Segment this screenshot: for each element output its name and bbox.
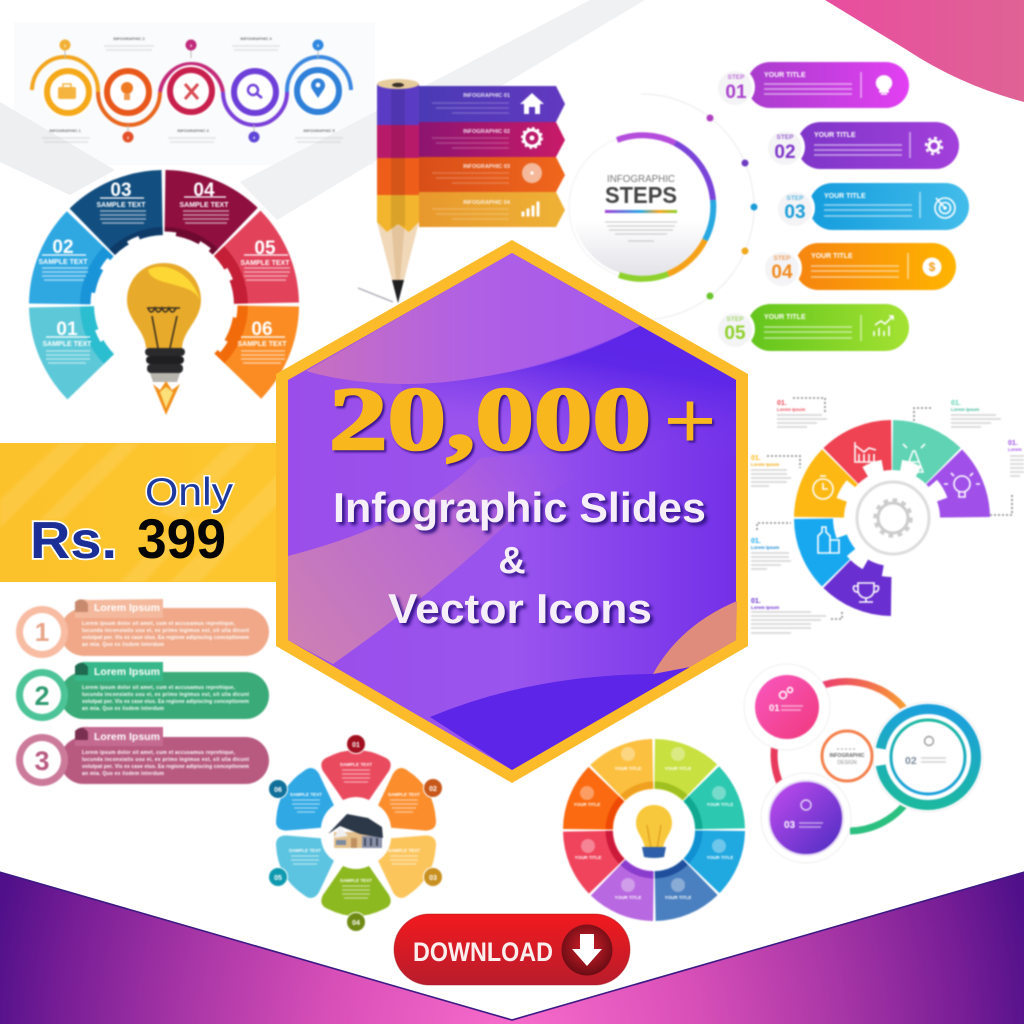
flower number nodes: 02 [429,786,437,793]
circle 2 [872,701,984,813]
circle 2: 02 [905,755,917,767]
fan labels: SAMPLE TEXT [179,202,229,209]
central badge: STEPS [605,182,677,208]
circle 3 [761,773,851,863]
gear fan callouts: 01. [751,538,761,545]
ribbon captions: INFOGRAPHIC 04 [463,200,511,206]
timeline rings [42,65,344,118]
list row 3 [16,727,269,786]
list row 1: Lorem ipsum dolor sit amet, cum et accusamus reprehique, [82,621,236,627]
ribbon captions: INFOGRAPHIC 03 [463,164,510,170]
gear fan callouts: Lorem [1008,447,1022,452]
gear fan callouts: 01. [751,455,761,462]
flower labels: SAMPLE TEXT [388,848,420,853]
step 4: STEP [774,255,791,262]
headline: subtitle: Vector Icons [388,585,652,632]
step 2: YOUR TITLE [814,132,856,139]
gear fan callouts: 01. [951,400,961,407]
gear fan callouts: 01. [1008,440,1018,447]
orbit and dots [641,94,758,320]
timeline wave ribbon [32,57,351,125]
list row 3: Iucunda inconsiatis usu ei, ex primo legimus est, sit ulia dicunt [82,757,249,763]
timeline nodes: 3 [190,43,193,48]
list row 3: an mia. Quo ex iisdem interdum [82,771,165,777]
list row 2 [16,662,269,721]
wheel labels: YOUR TITLE [707,802,733,807]
list row 1 [16,599,269,658]
flower number nodes: 06 [274,787,282,794]
flower number nodes: 05 [274,875,282,882]
connector ring [774,682,907,831]
step 3 [775,183,969,230]
banner: price offer [0,443,282,582]
wheel labels: YOUR TITLE [575,855,601,860]
step 1: STEP [728,74,745,81]
flower labels: SAMPLE TEXT [290,792,322,797]
timeline nodes: 1 [64,43,67,48]
gear fan callouts [751,398,1024,633]
step 5: 05 [724,323,746,344]
list row 1: an mia. Quo ex iisdem interdum [82,642,165,648]
step 5: YOUR TITLE [764,314,806,321]
ribbon captions: INFOGRAPHIC 02 [463,129,510,135]
fan labels: SAMPLE TEXT [38,259,88,266]
step 4: 04 [771,262,793,283]
central badge [569,135,713,279]
panel: three numbered ribbon list [16,599,269,786]
ribbon captions [432,93,511,219]
headline: subtitle [333,484,706,632]
step 4: $ [929,260,936,274]
step 4: YOUR TITLE [811,253,853,260]
gear fan callouts: 01. [751,598,761,605]
step 3: 03 [784,202,806,223]
ribbons [419,86,565,227]
step 4 [762,243,956,290]
list row 2: Lorem ipsum dolor sit amet, cum et accusamus reprehique, [82,685,236,691]
fan labels: SAMPLE TEXT [42,341,92,348]
flower labels: SAMPLE TEXT [340,762,372,767]
flower labels: SAMPLE TEXT [340,878,372,883]
list row 1: 1 [35,617,49,647]
flower number nodes [268,734,442,932]
fan labels: SAMPLE TEXT [96,202,146,209]
flower labels [289,762,420,898]
flower number nodes: 01 [352,742,360,749]
gear centre [839,465,945,571]
fan segments [20,161,308,449]
timeline nodes: 2 [127,135,130,140]
icon: house [323,800,389,866]
step 1 [715,62,909,108]
flower number nodes: 03 [429,875,437,882]
ribbon icons [520,93,544,216]
list row 3: Lorem Ipsum [94,731,160,743]
gear fan callouts: Lorem Ipsum [751,605,779,610]
list row 3: volutpat per. Vis ex case eius. Ea regione adipiscing conceptionem [82,764,250,770]
timeline captions: INFOGRAPHIC 4 [240,36,272,41]
fan labels: 06 [251,319,273,340]
ribbon captions: INFOGRAPHIC 01 [463,93,510,99]
white gear centre [93,234,235,376]
wheel labels: YOUR TITLE [665,766,691,771]
icon: wheel lightbulb [636,805,672,858]
flower petals [267,750,445,916]
gear fan segments [793,419,991,617]
step 1: YOUR TITLE [764,72,806,79]
step 3: YOUR TITLE [824,193,866,200]
wheel segments [561,737,747,923]
timeline captions: INFOGRAPHIC 5 [303,128,335,133]
panel: eight segment bulb wheel [561,737,747,923]
fan labels: 04 [193,180,215,201]
list row 3: 3 [34,746,50,776]
fan labels: SAMPLE TEXT [240,260,290,267]
headline: 20,000+ [329,370,717,469]
hexagon wave shapes [288,253,737,770]
timeline nodes [60,40,324,142]
wheel labels: YOUR TITLE [665,895,691,900]
circle 1: 01 [769,703,780,714]
step 1: 01 [725,82,747,103]
panel: three circle process [744,664,984,863]
centre badge: INFOGRAPHIC [830,753,865,759]
list row 1: Lorem Ipsum [94,602,160,614]
download button [394,914,630,985]
step 2 [765,122,959,169]
bottom purple-pink envelope shape [0,871,1024,1024]
fan labels: SAMPLE TEXT [237,341,287,348]
headline: subtitle: Infographic Slides [333,484,706,531]
step 5: STEP [727,316,744,323]
wheel labels [574,747,733,900]
centre badge [822,731,872,781]
timeline icons [58,78,325,100]
price: Rs.: Rs. [30,512,117,570]
list row 3: Lorem ipsum dolor sit amet, cum et accusamus reprehique, [82,750,236,756]
central badge: INFOGRAPHIC [607,174,675,185]
headline: subtitle: & [498,540,526,582]
fan labels [38,180,290,363]
timeline captions: INFOGRAPHIC 2 [113,36,145,41]
list row 2: Iucunda inconsiatis usu ei, ex primo legimus est, sit ulia dicunt [82,692,249,698]
list row 2: Lorem Ipsum [94,666,160,678]
step 2: 02 [774,142,796,163]
headline: 20,000+: 20,000 [329,370,651,469]
fan labels: 03 [110,180,132,201]
circle 3: 03 [784,820,796,831]
timeline captions: INFOGRAPHIC 3 [177,128,209,133]
gear fan icons [813,442,980,602]
pencil body [358,79,419,303]
panel: lightbulb fan chart with six segments [20,161,308,449]
timeline captions: INFOGRAPHIC 1 [49,128,81,133]
timeline nodes: 4 [253,135,256,140]
panel: timeline of five ring steps [32,36,351,142]
list row 2: an mia. Quo ex iisdem interdum [82,706,165,712]
timeline nodes: 5 [317,43,320,48]
panel: gear fan with six segments [751,398,1024,633]
flower labels: SAMPLE TEXT [388,792,420,797]
headline: 20,000+: + [663,375,717,468]
button label: DOWNLOAD [413,937,553,967]
gear fan callouts: Lorem Ipsum [951,407,979,412]
gear fan callouts: Lorem Ipsum [777,407,805,412]
price: 399: 399 [137,507,226,570]
panel: house flower chart [267,734,445,932]
list row 1: Iucunda inconsiatis usu ei, ex primo legimus est, sit ulia dicunt [82,628,249,634]
panel: pencil with four ribbons [358,79,565,303]
gear fan callouts: Lorem Ipsum [751,545,779,550]
gear fan callouts: 01. [777,400,787,407]
flower labels: SAMPLE TEXT [289,848,321,853]
step 5 [715,304,909,351]
icon: rocket lightbulb [127,263,201,415]
fan labels: 02 [52,237,74,258]
central hexagon headline [276,240,748,783]
list row 1: volutpat per. Vis ex case eius. Ea regione adipiscing conceptionem [82,635,250,641]
step 3: STEP [787,195,804,202]
list row 2: 2 [34,681,50,711]
price: only: Only [145,471,234,514]
gear fan callouts: Lorem Ipsum [751,462,779,467]
wheel labels: YOUR TITLE [707,855,733,860]
wheel labels: YOUR TITLE [615,766,641,771]
wheel labels: YOUR TITLE [574,802,600,807]
centre badge: DESIGN [837,760,857,766]
flower number nodes: 04 [352,920,360,927]
panel: infographic steps [569,62,969,351]
wheel labels: YOUR TITLE [615,895,641,900]
timeline captions [42,36,343,142]
fan labels: 05 [254,238,276,259]
list row 2: volutpat per. Vis ex case eius. Ea regione adipiscing conceptionem [82,699,250,705]
fan labels: 01 [56,319,78,340]
icon: download arrow [562,924,612,976]
top right pink corner [825,0,1024,102]
circle 1 [744,664,830,750]
step 2: STEP [777,134,794,141]
